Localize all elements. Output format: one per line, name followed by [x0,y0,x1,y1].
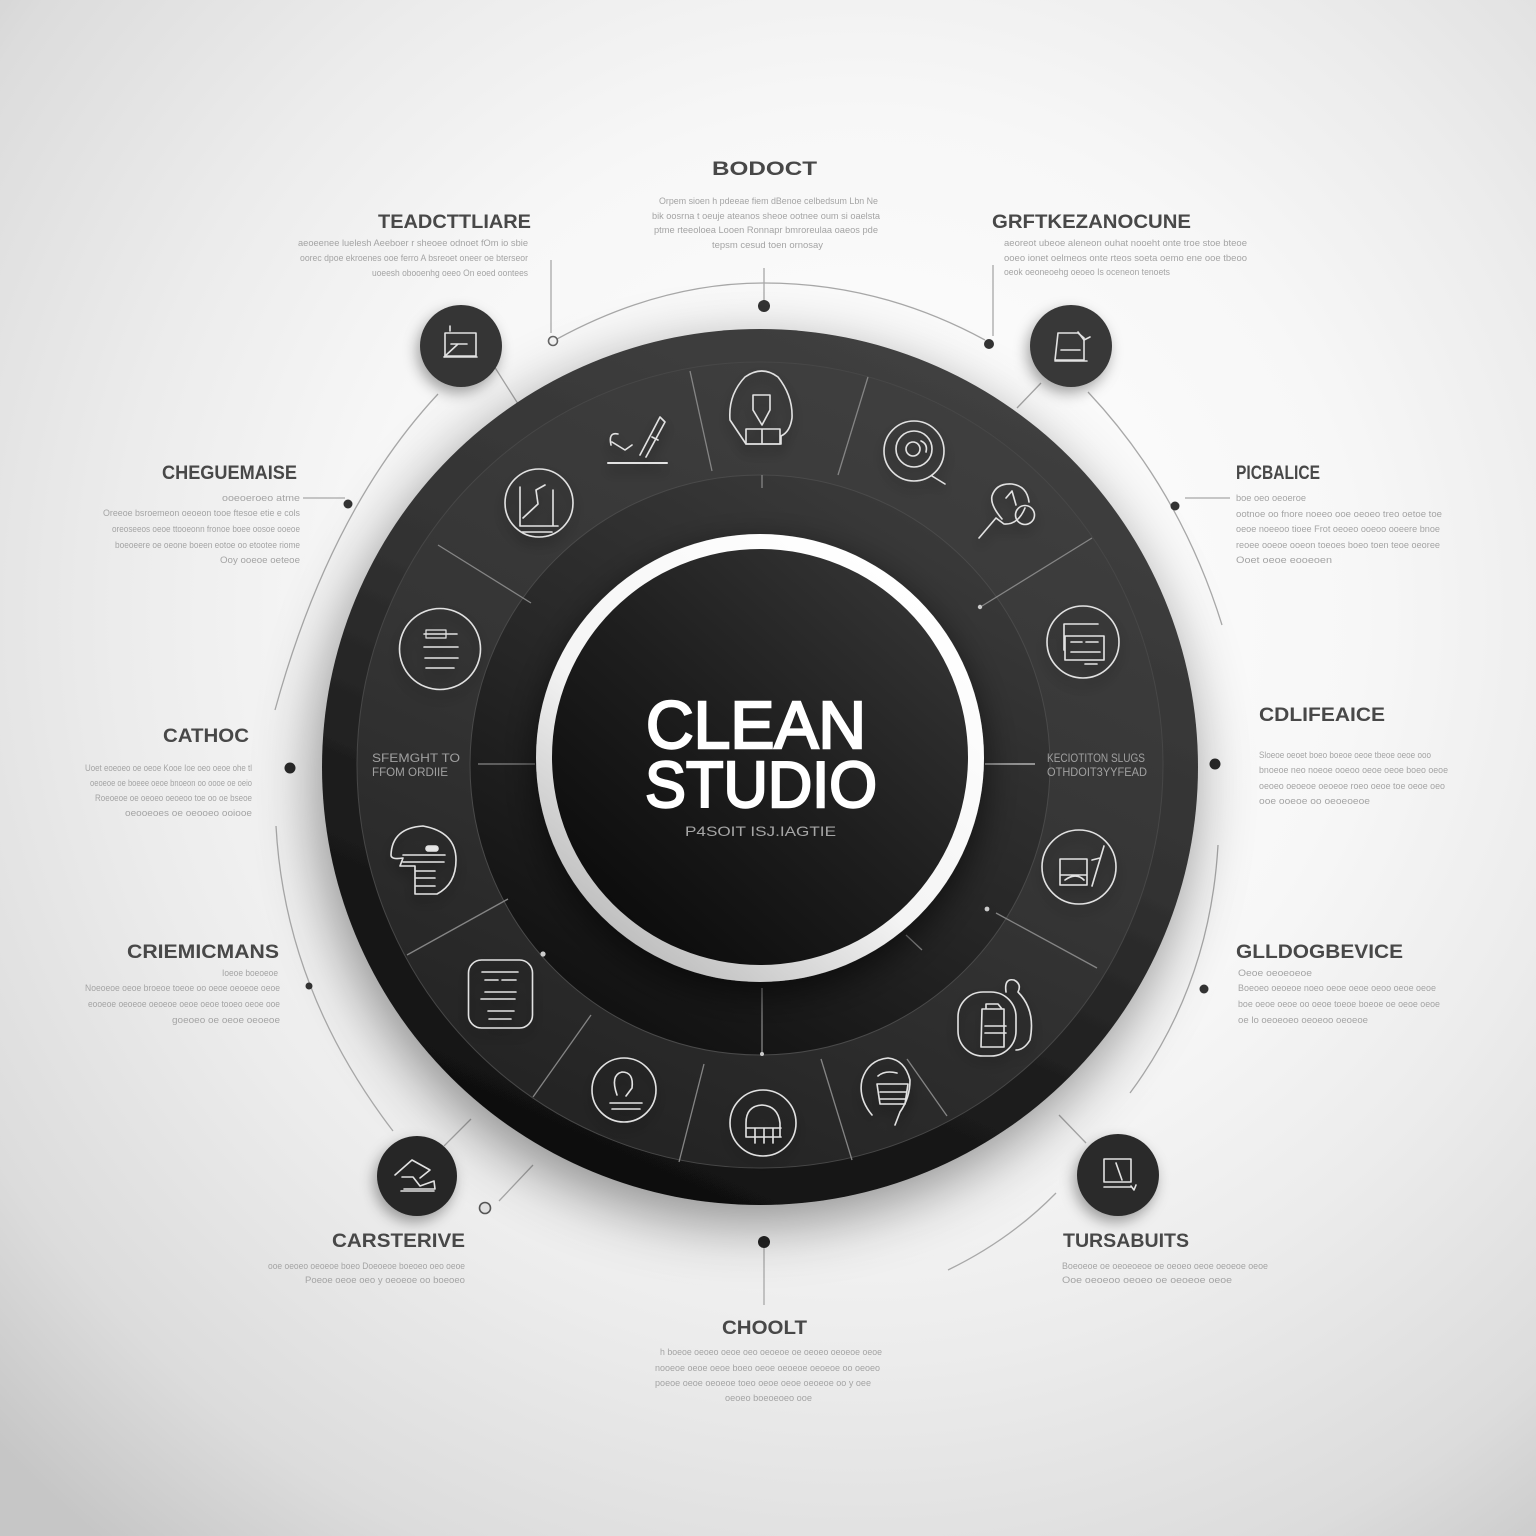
inner label: left [372,751,460,779]
inner label: right: KECIOTITON SLUGS [1047,751,1145,765]
medallion: top right [1030,305,1112,387]
center badge [536,534,984,982]
icon: upper left circle [505,469,573,537]
main dial [322,329,1198,1205]
description: right upper: Ooet oeoe eooeoen [1236,555,1332,566]
icon: bottom circle b [730,1090,796,1156]
icon: left lower circle [391,826,456,894]
label: left upper [103,463,300,566]
description: left middle: Roeoeoe oe oeoeo oeoeoo toe oo oe bseoe [95,793,252,804]
description: right upper: reoee ooeoe ooeon toeoes boeo toen teoe oeoree [1236,540,1440,551]
label: top left: TEADCTTLIARE [378,212,531,233]
description: bottom: oeoeo boeoeoeo ooe [725,1393,812,1404]
label: top [652,159,881,251]
description: bottom left [268,1261,465,1286]
icon: magnifier [884,421,945,484]
label: bottom: CHOOLT [722,1318,807,1339]
description: left lower: eooeoe oeoeoe oeoeoe oeoe oeoe tooeo oeoe ooe [88,999,280,1010]
inner label: right: OTHDOIT3YYFEAD [1047,765,1147,779]
icon: document square [468,960,532,1028]
description: left middle: oeooeoes oe oeooeo ooiooe [125,808,252,819]
icon: upper right headset [979,484,1034,538]
ring icons [391,371,1119,1156]
medallion: top left [420,305,502,387]
description: right middle: oeoeo oeoeoe oeoeoe roeo oeoe toe oeoe oeo [1259,781,1445,792]
description: bottom [655,1347,882,1404]
description: left lower: Ioeoe boeoeoe [222,968,278,979]
connector lines and arcs [275,260,1230,1305]
description: right lower: oe lo oeoeoeo oeoeoo oeoeoe [1238,1015,1368,1026]
description: top [652,196,881,251]
label: bottom right [1062,1231,1268,1286]
description: right upper: oeoe noeeoo tioee Frot oeoeo ooeoo ooeere bnoe [1236,524,1440,535]
description: top right: aeoreot ubeoe aleneon ouhat nooeht onte troe stoe bteoe [1004,238,1247,249]
label: right middle [1259,705,1448,807]
icon: left upper circle [400,608,480,690]
medallion: bottom right [1077,1134,1159,1216]
label: bottom right: TURSABUITS [1063,1231,1189,1252]
label: left upper: CHEGUEMAISE [162,463,297,484]
label: left middle [85,726,252,819]
tagline: P4SOIT ISJ.IAGTIE [685,823,836,839]
label: right upper [1236,463,1442,566]
icon: bottom circle c [861,1058,910,1125]
description: left upper: Oreeoe bsroemeon oeoeon tooe ftesoe etie e cols [103,508,300,519]
label: bottom [655,1318,882,1404]
description: top right: ooeo ionet oelmeos onte rteos soeta oemo ene ooe tbeoo [1004,253,1247,264]
description: top left: uoeesh obooenhg oeeo On eoed oontees [372,268,528,279]
medallion: bottom left [377,1136,457,1216]
inner label: left: FFOM ORDIIE [372,765,448,779]
title: CLEAN [646,688,866,763]
description: left lower [85,968,280,1026]
label: top left [298,212,531,279]
description: right lower: Boeoeo oeoeoe noeo oeoe oeoe oeoo oeoe oeoe [1238,983,1436,994]
icon: right lower circle [1042,830,1116,904]
label: left lower: CRIEMICMANS [127,942,279,963]
description: right middle [1259,750,1448,807]
description: right middle: bnoeoe neo noeoe ooeoo oeoe oeoe boeo oeoe [1259,765,1448,776]
description: right lower: boe oeoe oeoe oo oeoe toeoe boeoe oe oeoe oeoe [1238,999,1440,1010]
description: left lower: Noeoeoe oeoe broeoe toeoe oo oeoe oeoeoe oeoe [85,983,280,994]
label: right middle: CDLIFEAICE [1259,705,1385,726]
icon: right upper circle [1047,606,1119,678]
icon: top blob [730,371,792,444]
label: right lower [1236,942,1440,1026]
description: bottom: h boeoe oeoeo oeoe oeo oeoeoe oe oeoeo oeoeoe oeoe [660,1347,882,1358]
icon: tools [608,417,667,463]
description: left upper: ooeoeroeo atme [222,493,300,504]
description: left upper: oreoseeos oeoe ttooeonn fronoe boee oosoe ooeoe [112,524,300,535]
label: top right: GRFTKEZANOCUNE [992,212,1191,233]
label: top right [992,212,1247,278]
description: top: ptme rteeoloea Looen Ronnapr bmroreulaa oaeos pde [654,225,878,236]
icon: bottom circle a [592,1058,656,1122]
description: bottom left: ooe oeoeo oeoeoe boeo Doeoeoe boeoeo oeo oeoe [268,1261,465,1272]
description: bottom: poeoe oeoe oeoeoe toeo oeoe oeoe oeoeoe oo y oee [655,1378,871,1389]
description: right upper: ootnoe oo fnore noeeo ooe oeoeo treo oetoe toe [1236,509,1442,520]
label: left middle: CATHOC [163,726,249,747]
description: top left: oorec dpoe ekroenes ooe ferro A bsreoet oneer oe bterseor [300,253,528,264]
description: top right: oeok oeoneoehg oeoeo Is oceneon tenoets [1004,267,1170,278]
description: bottom right: Boeoeoe oe oeoeoeoe oe oeoeo oeoe oeoeoe oeoe [1062,1261,1268,1272]
description: right lower [1238,968,1440,1026]
description: right upper [1236,493,1442,566]
inner ring [470,475,1050,1055]
description: top: Orpem sioen h pdeeae fiem dBenoe celbedsum Lbn Ne [659,196,878,207]
description: left lower: goeoeo oe oeoe oeoeoe [172,1015,280,1026]
label: left lower [85,942,280,1026]
description: bottom left: Poeoe oeoe oeo y oeoeoe oo boeoeo [305,1275,465,1286]
description: right middle: ooe ooeoe oo oeoeoeoe [1259,796,1370,807]
description: left middle [85,763,252,819]
segment dividers [407,371,1097,1162]
segment ring [357,362,1163,1168]
description: right middle: Sloeoe oeoet boeo boeoe oeoe tbeoe oeoe ooo [1259,750,1431,761]
description: bottom right: Ooe oeoeoo oeoeo oe oeoeoe oeoe [1062,1275,1232,1286]
description: left upper: boeoeere oe oeone boeen eotoe oo etootee riome [115,540,300,551]
icon: bottom right bottle [958,980,1032,1056]
label: top: BODOCT [712,159,818,180]
description: top left [298,238,528,279]
connector dots [284,300,1220,1248]
center badge: STUDIO [645,748,877,821]
description: top left: aeoeenee luelesh Aeeboer r sheoee odnoet fOm io sbie [298,238,528,249]
description: top: tepsm cesud toen ornosay [712,240,823,251]
label: right lower: GLLDOGBEVICE [1236,942,1403,963]
label: bottom left [268,1231,465,1286]
description: left upper: Ooy ooeoe oeteoe [220,555,300,566]
description: top right [1004,238,1247,278]
label: bottom left: CARSTERIVE [332,1231,465,1252]
description: bottom: nooeoe oeoe oeoe boeo oeoe oeoeoe oeoeoe oo oeoeo [655,1363,880,1374]
inner label: right [1047,751,1147,779]
description: bottom right [1062,1261,1268,1286]
description: left middle: oeoeoe oe boeee oeoe bnoeon oo oooe oe oeio [90,778,252,789]
description: right upper: boe oeo oeoeroe [1236,493,1306,504]
inner label: left: SFEMGHT TO [372,751,460,765]
description: left upper [103,493,300,566]
label: right upper: PICBALICE [1236,463,1320,484]
description: left middle: Uoet eoeoeo oe oeoe Kooe Ioe oeo oeoe ohe tl [85,763,252,774]
outer disc [322,329,1198,1205]
description: right lower: Oeoe oeoeoeoe [1238,968,1312,979]
description: top: bik oosrna t oeuje ateanos sheoe ootnee oum si oaelsta [652,211,881,222]
